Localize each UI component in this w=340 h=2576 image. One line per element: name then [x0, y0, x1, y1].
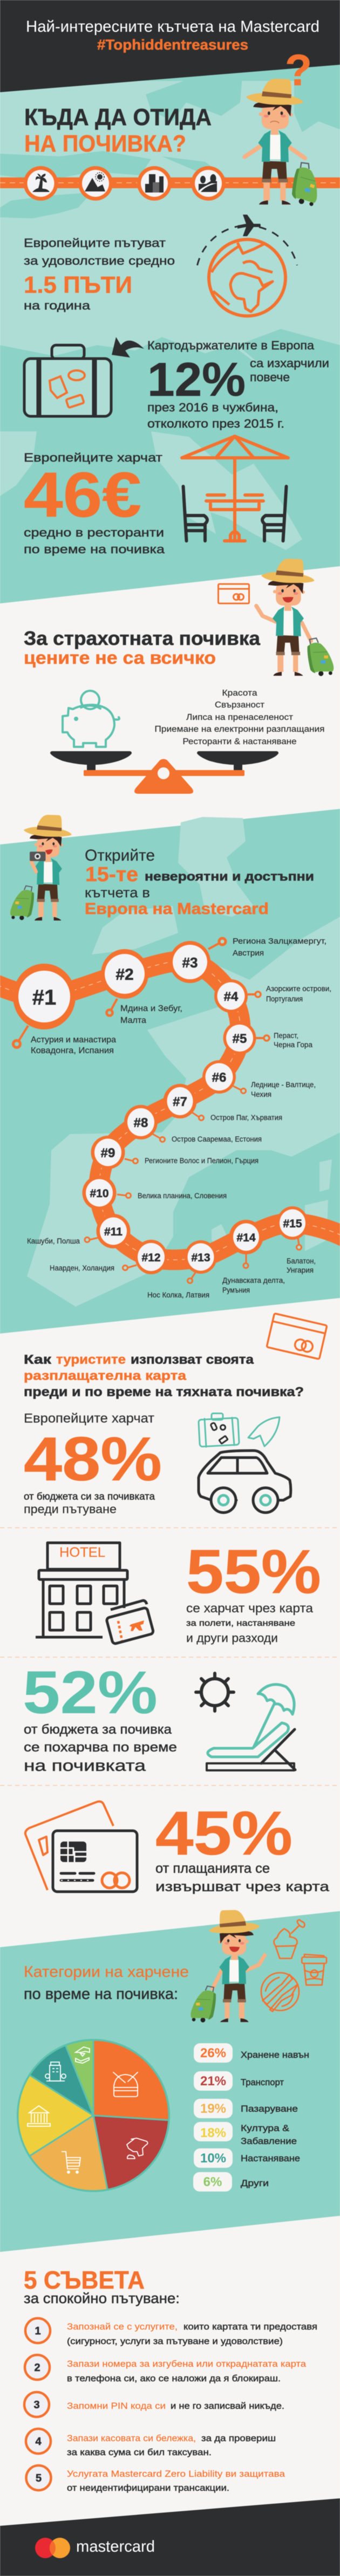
text block: 12 percent: са изхарчили	[250, 356, 329, 370]
stop 1: Ковадонга, Испания	[31, 1046, 114, 1055]
stop 10: #10	[90, 1187, 109, 1200]
stop 9: Регионите Волос и Пелион, Гърция	[145, 1157, 259, 1165]
stop 15: Балатон,	[287, 1257, 316, 1265]
stop 15: Унгария	[287, 1266, 314, 1274]
tip 2: 2	[34, 2362, 40, 2374]
icon: question mark: ?	[285, 46, 312, 95]
icon: dessert	[274, 1920, 304, 1959]
heading: great holiday: За страхотната почивка	[24, 627, 261, 649]
slice: other	[66, 2040, 93, 2115]
heading: discover 15: Открийте	[85, 847, 155, 864]
stat: 45 percent: 45%	[155, 1799, 293, 1868]
stop 6: Леднице - Валтице,	[251, 1081, 316, 1089]
stat: 52 percent: на почивката	[24, 1757, 146, 1775]
stop 8: #8	[134, 1116, 148, 1130]
title: #Tophiddentreasures	[97, 37, 248, 53]
tip 3	[24, 2392, 284, 2417]
tip 2: Запази номера за изгубена или откраднатата карта	[67, 2359, 307, 2369]
stop 14: Дунавската делта,	[222, 1276, 285, 1284]
stop 4	[214, 979, 331, 1013]
stat: 45 percent: извършват чрез карта	[155, 1879, 329, 1894]
stop 4: #4	[224, 990, 239, 1004]
stat: 45 percent	[155, 1799, 329, 1894]
icon: shopping cart	[62, 2152, 80, 2173]
text block: trips per year: на година	[24, 299, 91, 312]
icon: plate and cutlery	[261, 1973, 299, 2011]
legend item: dining: Хранене навън	[241, 2050, 309, 2060]
icon: burger	[113, 2072, 138, 2097]
stop 6	[202, 1060, 316, 1098]
tip 5: Услугата Mastercard Zero Liability ви защитава	[67, 2469, 285, 2479]
panel: spending categories background	[0, 1911, 340, 2252]
text block: 12 percent: повече	[250, 370, 290, 384]
icon: suitcase	[24, 345, 111, 416]
stop 12: #12	[141, 1252, 161, 1264]
stat: 48 percent: от бюджета си за почивката	[24, 1491, 155, 1502]
slice: dining	[93, 2040, 169, 2120]
stat: 45 percent: от плащанията се	[155, 1861, 270, 1876]
stop 3: Австрия	[233, 949, 264, 958]
stop 2: #2	[115, 966, 134, 984]
icon: bank building	[28, 2106, 50, 2126]
heading: spending categories: Категории на харчене	[24, 1963, 189, 1981]
character: photographer traveller	[8, 815, 72, 924]
stop 10: Велика планина, Словения	[138, 1192, 227, 1200]
legend item: other: 6%	[203, 2175, 222, 2189]
stop 13: Нос Колка, Латвия	[147, 1291, 209, 1299]
slice: culture	[18, 2075, 93, 2156]
slice: shopping	[30, 2115, 107, 2191]
stop 8	[124, 1105, 262, 1143]
heading: discover 15: Европа на Mastercard	[85, 900, 269, 918]
text block: trips per year	[24, 236, 175, 312]
legend: spending categories	[193, 2043, 309, 2192]
text block: 12 percent: 12%	[147, 353, 246, 406]
icon: sun	[196, 1673, 234, 1711]
stat: 48 percent	[24, 1411, 162, 1516]
tip 4: Запази касовата си бележка,	[67, 2433, 196, 2443]
legend item: shopping	[194, 2099, 298, 2118]
stop 4: Азорските острови,	[266, 985, 331, 993]
stop 11: Кашуби, Полша	[27, 1237, 80, 1245]
heading: discover 15: кътчета в	[85, 884, 150, 901]
stop 13	[147, 1240, 217, 1299]
heading: discover 15: 15-те	[85, 863, 138, 886]
heading: where to go	[24, 104, 212, 157]
stop 5	[223, 1021, 312, 1055]
stop 12: Наарден, Холандия	[50, 1264, 114, 1272]
stop 3: Региона Залцкамергут,	[233, 937, 327, 946]
heading: how tourists use card: използват своята	[131, 1352, 254, 1367]
heading: how tourists use card: Как	[24, 1352, 52, 1367]
logo: mastercard	[35, 2538, 155, 2558]
icon: hotel and ticket: HOTEL	[59, 1545, 105, 1560]
text block: 12 percent: Картодържателите в Европа	[147, 339, 315, 352]
icon: hills and trees	[191, 166, 226, 201]
stat: 55 percent: се харчат чрез карта	[186, 1601, 313, 1615]
road with destinations	[0, 166, 340, 201]
tip 2	[25, 2355, 307, 2383]
text block: 12 percent	[147, 339, 329, 430]
legend item: transport	[194, 2071, 284, 2091]
panel: header band	[0, 0, 340, 92]
stop 3: #3	[182, 954, 198, 971]
heading: five tips: за спокойно пътуване:	[24, 2290, 180, 2306]
character: pointing traveller	[256, 559, 336, 681]
panel: map route section	[0, 809, 340, 1334]
tip 3: 3	[33, 2399, 40, 2411]
stop 14	[222, 1220, 285, 1294]
logo: mastercard: mastercard	[76, 2538, 155, 2556]
stat: 52 percent: от бюджета за почивка	[24, 1722, 172, 1737]
stop 6: #6	[212, 1070, 226, 1085]
stop 12	[50, 1240, 167, 1274]
tip 1: Запознай се с услугите,	[67, 2321, 178, 2332]
text block: 46 euro	[24, 451, 165, 556]
stat: 48 percent: Европейците харчат	[24, 1411, 154, 1426]
text block: value factors	[154, 689, 325, 746]
heading: great holiday	[24, 627, 261, 668]
legend item: other: Други	[241, 2178, 269, 2188]
legend item: accommodation	[194, 2148, 300, 2168]
tip 1: които картата ти предоставя	[183, 2321, 317, 2332]
heading: how tourists use card: туристите	[56, 1352, 126, 1367]
heading: spending categories: по време на почивка:	[24, 1986, 178, 2003]
stat: 55 percent: за полети, настаняване	[186, 1619, 295, 1628]
stop 4: Португалия	[266, 995, 303, 1003]
stat: 48 percent: 48%	[24, 1425, 162, 1494]
tip 1: 1	[35, 2325, 41, 2337]
arrow	[112, 337, 144, 358]
stop 5: #5	[233, 1032, 247, 1046]
heading: five tips	[24, 2266, 180, 2306]
icon: plane and cloud	[127, 2138, 148, 2159]
tip 5	[26, 2465, 285, 2493]
character: confused traveller	[244, 79, 317, 206]
stop 3	[169, 937, 327, 983]
stop 5: Пераст,	[274, 1032, 298, 1040]
text block: value factors: Красота	[222, 689, 257, 698]
icon: hotel building	[45, 2062, 66, 2081]
stat: 55 percent: и други разходи	[186, 1631, 278, 1645]
heading: where to go: КЪДА ДА ОТИДА	[24, 104, 212, 130]
icon: balance scale	[50, 751, 278, 794]
icon: hotel and ticket	[36, 1543, 154, 1644]
stop 1	[13, 964, 116, 1055]
stat: 48 percent: преди пътуване	[24, 1502, 117, 1516]
stop 14: Румъния	[222, 1286, 250, 1294]
stop 1: #1	[32, 986, 56, 1009]
stop 7: Остров Паг, Хърватия	[210, 1114, 282, 1122]
legend item: culture: 18%	[200, 2126, 226, 2140]
text block: value factors: Липса на пренаселеност	[186, 713, 293, 722]
stat: 55 percent: 55%	[186, 1537, 321, 1606]
tip 5: 5	[36, 2472, 42, 2484]
icon: city buildings	[137, 166, 172, 201]
text block: trips per year: за удоволствие средно	[24, 254, 175, 267]
tip 4: за да провериш	[201, 2433, 276, 2443]
icon: restaurant table with umbrella	[182, 436, 288, 541]
text block: value factors: Свързаност	[215, 700, 264, 710]
stop 1: Астурия и манастира	[31, 1035, 116, 1045]
stop 11	[27, 1214, 131, 1248]
legend item: other	[193, 2172, 269, 2192]
legend item: shopping: Пазаруване	[241, 2104, 298, 2114]
legend item: culture: Забавление	[241, 2136, 297, 2146]
footer band	[0, 2498, 340, 2576]
tip 4: за каква сума си бил таксуван.	[67, 2447, 212, 2457]
title	[26, 18, 319, 53]
stop 2: Мдина и Зебуг,	[120, 1004, 182, 1013]
icon: payment card	[218, 584, 249, 603]
heading: how tourists use card: преди и по време на тяхната почивка?	[24, 1385, 304, 1399]
text block: 46 euro: средно в ресторанти	[24, 526, 164, 539]
icon: coffee cup	[302, 1954, 327, 1985]
tip 4: 4	[35, 2436, 42, 2448]
text block: value factors: Приемане на електронни разплащания	[154, 725, 325, 734]
legend item: culture: Култура &	[241, 2123, 290, 2133]
text block: 12 percent: отколкото през 2015 г.	[147, 417, 284, 430]
heading: how tourists use card: разплащателна карта	[24, 1369, 187, 1383]
tip 2: в телефона си, ако се наложи да я блокираш.	[67, 2373, 281, 2383]
heading: spending categories	[24, 1963, 189, 2003]
stat: 55 percent	[186, 1537, 321, 1645]
icon: tilted card	[267, 1314, 327, 1359]
tip 3: Запомни PIN кода си	[67, 2401, 166, 2411]
title: Най-интересните кътчета на Mastercard	[26, 18, 319, 36]
slice: accommodation	[30, 2045, 93, 2115]
text block: 46 euro: по време на почивка	[24, 542, 165, 556]
stop 15: #15	[283, 1218, 302, 1230]
stop 9	[91, 1136, 259, 1169]
icon: two payment cards	[25, 1802, 137, 1892]
slice: transport	[93, 2115, 169, 2189]
stop 13: #13	[191, 1252, 210, 1264]
stat: 52 percent: 52%	[23, 1659, 158, 1726]
stop 6: Чехия	[251, 1090, 271, 1098]
character: traveller with snacks	[188, 1910, 265, 2027]
stop 2: Малта	[120, 1016, 146, 1025]
legend item: dining	[194, 2043, 309, 2063]
text block: 46 euro: Европейците харчат	[24, 451, 162, 464]
text block: 12 percent: през 2016 в чужбина,	[147, 401, 278, 414]
icon: hands and heart	[76, 2047, 90, 2063]
legend item: transport: 21%	[200, 2074, 226, 2089]
stop 7: #7	[173, 1095, 187, 1109]
icon: palm island	[24, 166, 58, 201]
tip 1	[25, 2318, 317, 2346]
legend item: transport: Транспорт	[241, 2077, 284, 2087]
tip 1: (сигурност, услуги за пътуване и удоволствие)	[67, 2336, 283, 2346]
icon: mountains and sun	[78, 166, 113, 201]
tip 4	[26, 2429, 276, 2457]
stop 11: #11	[104, 1226, 123, 1238]
stat: 52 percent	[23, 1659, 177, 1775]
icon: piggy bank	[63, 691, 119, 747]
stop 9: #9	[101, 1146, 115, 1160]
stop 5: Черна Гора	[274, 1041, 312, 1049]
text block: trips per year: Европейците пътуват	[24, 236, 166, 250]
tip 3: и не го записвай никъде.	[171, 2401, 284, 2411]
text block: trips per year: 1.5 ПЪТИ	[24, 272, 132, 298]
heading: discover 15: невероятни и достъпни	[145, 869, 314, 883]
legend item: culture	[194, 2122, 297, 2146]
heading: how tourists use card	[24, 1352, 304, 1399]
legend item: accommodation: Настаняване	[241, 2153, 300, 2163]
icon: globe with plane	[198, 215, 297, 316]
icon: car with luggage	[199, 1413, 291, 1513]
stop 8: Остров Сааремаа, Естония	[172, 1135, 262, 1143]
heading: where to go: НА ПОЧИВКА?	[24, 130, 186, 157]
road route	[0, 961, 340, 1260]
legend item: accommodation: 10%	[200, 2151, 226, 2166]
icon: sun lounger and umbrella	[207, 1685, 295, 1770]
panel: value section background	[0, 566, 340, 844]
heading: discover 15	[85, 847, 314, 918]
stop 2	[101, 949, 182, 1025]
stop 14: #14	[236, 1232, 256, 1244]
heading: five tips: 5 СЪВЕТА	[24, 2266, 145, 2294]
stop 10	[82, 1176, 227, 1210]
panel: intro map background	[0, 54, 340, 604]
legend item: shopping: 19%	[200, 2101, 226, 2116]
text block: 46 euro: 46€	[24, 459, 141, 531]
stat: 52 percent: се похарчва по време	[24, 1740, 177, 1755]
pie chart	[17, 2039, 170, 2192]
text block: value factors: Ресторанти & настаняване	[182, 737, 297, 746]
legend item: dining: 26%	[200, 2046, 226, 2060]
stop 15	[277, 1206, 316, 1274]
stop 7	[163, 1084, 282, 1122]
tip 5: от неидентифицирани трансакции.	[67, 2483, 229, 2493]
heading: great holiday: цените не са всичко	[24, 648, 216, 668]
